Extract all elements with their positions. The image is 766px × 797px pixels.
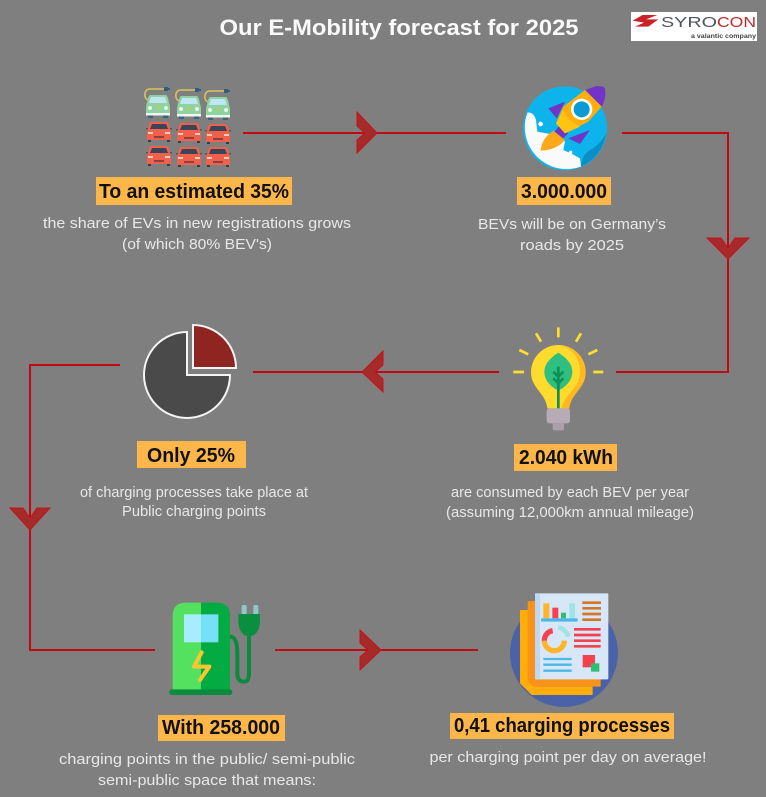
text: EV share [43,215,351,253]
logo: SyroCon: CON [717,14,756,31]
text: charging processes per point: per charging point per day on average! [430,749,706,766]
logo: SyroCon: SYRO [661,14,717,31]
text: EV share: (of which 80% BEV's) [122,236,272,253]
text: charging points [59,751,356,789]
text: BEVs on roads [478,216,666,254]
text: consumption: (assuming 12,000km annual mileage) [446,504,694,521]
arrow: EV share to BEV count [243,112,506,153]
icon: pie chart 25% [144,325,236,418]
highlight: Only 25% [137,441,246,468]
icon: charging station [169,603,260,695]
arrow: public charging share to charging points [10,365,155,650]
logo: SyroCon: a valantic company [691,33,756,40]
arrow: BEV count to consumption [616,133,749,372]
text: public charging share: Public charging points [122,503,266,520]
highlight: With 258.000: With 258.000 [162,717,280,739]
icon: light bulb with leaf [513,327,603,430]
text: BEVs on roads: roads by 2025 [520,237,624,254]
highlight: 3.000.000: 3.000.000 [521,181,607,203]
highlight: To an estimated 35%: To an estimated 35% [99,181,289,203]
highlight: Only 25%: Only 25% [147,445,235,467]
logo: SyroCon [631,12,757,41]
text: consumption: are consumed by each BEV per year [451,484,689,501]
text: EV share: the share of EVs in new registrations grows [43,215,351,232]
highlight: 0,41 charging processes: 0,41 charging processes [454,715,670,737]
arrow: consumption to public charging share [253,351,499,392]
text: consumption [446,484,694,521]
text: public charging share: of charging processes take place at [80,484,309,501]
icon: report documents [510,593,618,707]
highlight: 2.040 kWh: 2.040 kWh [519,447,613,469]
icon: electric and conventional cars [145,87,231,167]
icon: rocket [523,86,607,170]
title: Our E-Mobility forecast for 2025 [220,15,578,40]
arrow: charging points to charging processes [275,630,478,670]
text: charging points: charging points in the public/ semi-public [59,751,356,768]
text: public charging share [80,484,309,520]
text: charging points: semi-public space that means: [98,772,316,789]
text: BEVs on roads: BEVs will be on Germany’s [478,216,666,233]
